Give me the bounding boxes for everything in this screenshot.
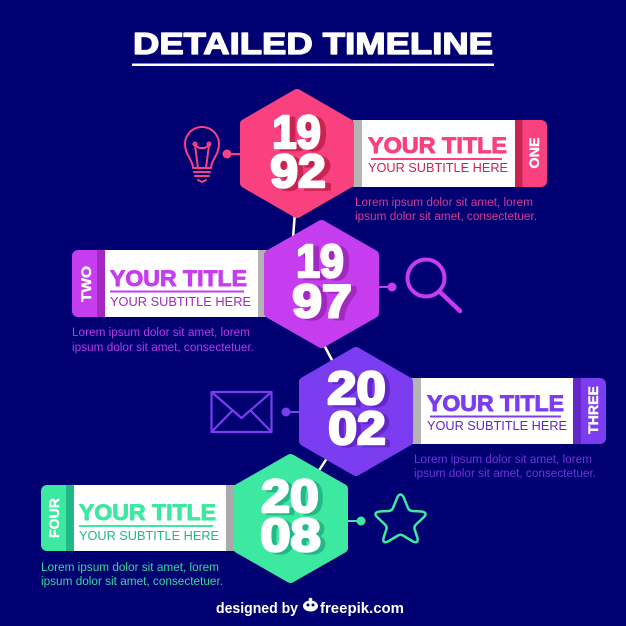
text: description three: ipsum dolor sit amet, consectetuer. [414,466,596,480]
year: 92 [276,148,332,200]
year: 20 [261,470,319,522]
icon: star [375,494,426,542]
text: description three [414,452,596,480]
year: 19 [272,106,321,158]
card: three: YOUR SUBTITLE HERE [427,419,567,433]
panel: 1992 [185,94,547,223]
year: 19 [278,108,326,160]
year: 97 [292,275,352,327]
card: one: YOUR SUBTITLE HERE [368,161,508,175]
card: four: YOUR TITLE [79,500,216,525]
year [260,470,326,563]
text: description one: Lorem ipsum dolor sit amet, lorem [355,195,533,209]
card: three: YOUR TITLE [427,391,564,416]
text: description three: Lorem ipsum dolor sit amet, lorem [414,452,592,466]
panel: 1997 [72,225,460,354]
footer credit: designed by [216,601,298,617]
card: three: THREE [585,386,601,434]
text: description one [355,195,537,223]
year: 08 [260,509,321,561]
year [270,106,332,200]
title: DETAILED TIMELINE [133,26,493,61]
year: 20 [266,472,324,524]
year [292,235,358,329]
year: 19 [302,237,350,289]
connector dot [222,150,242,158]
panel: 2008 [41,459,426,588]
icon: envelope [212,392,272,432]
text: description two: Lorem ipsum dolor sit amet, lorem [72,325,250,339]
card: one: ONE [526,138,542,168]
icon: magnifying glass [408,260,460,311]
connector dot [347,516,366,526]
text: description four: Lorem ipsum dolor sit amet, lorem [41,560,219,574]
year: 20 [327,362,386,414]
card: four: FOUR [46,498,62,538]
text: description two [72,325,254,354]
text: description two: ipsum dolor sit amet, consectetuer. [72,340,254,354]
icon: freepik logo [303,598,318,612]
card: one [353,120,547,187]
year [327,362,390,456]
card: two [72,250,267,317]
hexagon [238,459,343,578]
connector: 1997 to 2002 [323,343,333,362]
year: 02 [333,404,390,456]
year: 08 [265,511,326,563]
text: description one: ipsum dolor sit amet, consectetuer. [355,209,537,223]
connector dot [378,282,396,292]
icon: light bulb [185,127,219,182]
year: 02 [328,402,386,454]
connector dot [282,408,300,416]
hexagon [245,94,349,213]
footer credit [216,598,404,617]
card: three [411,378,606,444]
card: one: YOUR TITLE [368,133,507,158]
year: 19 [296,235,344,287]
card: four: YOUR SUBTITLE HERE [79,529,219,543]
card: four [41,485,235,551]
card: two: TWO [78,266,94,302]
hexagon [269,225,374,343]
card: two: YOUR SUBTITLE HERE [110,295,251,309]
year: 92 [270,145,326,197]
year: 97 [298,277,358,329]
connector: 2002 to 2008 [318,452,331,472]
hexagon [304,352,408,471]
text: description four: ipsum dolor sit amet, consectetuer. [41,574,223,588]
text: description four [41,560,223,588]
year: 20 [332,364,390,416]
card: two: YOUR TITLE [110,266,247,291]
connector: 1992 to 1997 [293,212,295,238]
panel: 2002 [212,352,606,480]
footer credit: freepik.com [320,601,404,617]
